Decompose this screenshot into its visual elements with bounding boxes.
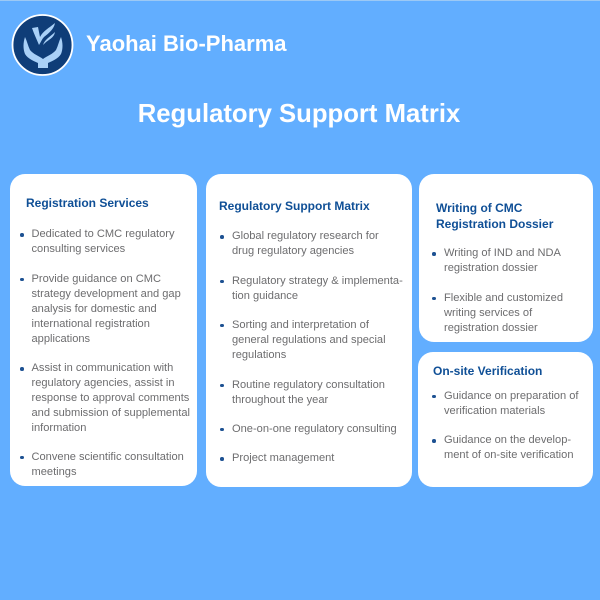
text block: routine consultation: throughout the year bbox=[232, 394, 328, 406]
text block: interpretation of regulations: regulations bbox=[232, 348, 286, 360]
text block: on-site development: ment of on-site verification bbox=[444, 449, 574, 461]
text block: strategy implementation bbox=[220, 274, 403, 302]
text block: CMC consulting: consulting services bbox=[32, 243, 125, 255]
heading: Registration Services: Registration Services bbox=[26, 196, 149, 210]
text block: strategy guidance: international registration bbox=[32, 318, 150, 330]
text block: IND and NDA: registration dossier bbox=[444, 262, 538, 274]
text block: on-site development bbox=[432, 434, 574, 461]
panel: Regulatory Support Matrix bbox=[206, 174, 412, 487]
text block: strategy implementation: tion guidance bbox=[232, 290, 298, 302]
company name: Yaohai Bio-Pharma bbox=[86, 31, 287, 56]
text block: verification materials: verification materials bbox=[444, 404, 545, 416]
text block: agency communication bbox=[20, 362, 190, 434]
text block: interpretation of regulations: Sorting and interpretation of bbox=[232, 318, 369, 330]
text block: global research bbox=[220, 230, 379, 257]
text block: global research: drug regulatory agencies bbox=[232, 245, 354, 257]
text block: interpretation of regulations: general regulations and special bbox=[232, 334, 386, 346]
text block: verification materials bbox=[432, 390, 578, 416]
panel: On-site Verification bbox=[418, 352, 593, 487]
text block: global research: Global regulatory research for bbox=[232, 230, 379, 242]
text block: scientific meetings: Convene scientific consultation bbox=[32, 450, 184, 462]
text block: agency communication: Assist in communication with bbox=[32, 362, 173, 374]
text block: one-on-one: One-on-one regulatory consulting bbox=[232, 422, 397, 434]
text block: agency communication: regulatory agencies, assist in bbox=[32, 377, 175, 389]
heading: Writing of CMC Registration Dossier: Writing of CMC bbox=[436, 201, 522, 215]
text block: strategy guidance: analysis for domestic and bbox=[32, 302, 157, 314]
heading: Regulatory Support Matrix: Regulatory Support Matrix bbox=[219, 199, 370, 213]
text block: scientific meetings bbox=[20, 450, 184, 478]
text block: IND and NDA bbox=[432, 247, 561, 274]
text block: scientific meetings: meetings bbox=[32, 466, 77, 478]
title: Regulatory Support Matrix bbox=[138, 100, 460, 128]
heading: Writing of CMC Registration Dossier: Registration Dossier bbox=[436, 217, 553, 231]
text block: CMC consulting: Dedicated to CMC regulatory bbox=[32, 228, 175, 240]
text block: flexible writing: Flexible and customized bbox=[444, 292, 563, 304]
panel: Registration Services bbox=[10, 174, 197, 486]
text block: flexible writing: registration dossier bbox=[444, 322, 538, 334]
text block: CMC consulting bbox=[20, 228, 175, 255]
text block: routine consultation bbox=[220, 378, 385, 406]
text block: routine consultation: Routine regulatory consultation bbox=[232, 378, 385, 390]
text block: strategy guidance bbox=[20, 272, 181, 344]
panel: Writing of CMC Registration Dossier bbox=[419, 174, 593, 342]
text block: IND and NDA: Writing of IND and NDA bbox=[444, 247, 561, 259]
text block: agency communication: information bbox=[32, 422, 86, 434]
text block: agency communication: and submission of supplemental bbox=[32, 407, 190, 419]
text block: agency communication: response to approval comments bbox=[32, 392, 189, 404]
text block: flexible writing: writing services of bbox=[444, 306, 532, 318]
icon: company logo, hands holding leaves bbox=[12, 14, 74, 76]
text block: verification materials: Guidance on preparation of bbox=[444, 390, 578, 402]
text block: project management: Project management bbox=[232, 452, 334, 464]
text block: flexible writing bbox=[432, 292, 563, 334]
heading: Writing of CMC Registration Dossier bbox=[436, 201, 554, 231]
text block: interpretation of regulations bbox=[220, 318, 386, 360]
text block: strategy implementation: Regulatory strategy & implementa- bbox=[232, 274, 403, 286]
text block: strategy guidance: applications bbox=[32, 332, 90, 344]
text block: on-site development: Guidance on the develop- bbox=[444, 434, 571, 446]
text block: strategy guidance: Provide guidance on CMC bbox=[32, 272, 161, 284]
text block: strategy guidance: strategy development and gap bbox=[32, 288, 181, 300]
heading: On-site Verification: On-site Verification bbox=[433, 364, 542, 378]
